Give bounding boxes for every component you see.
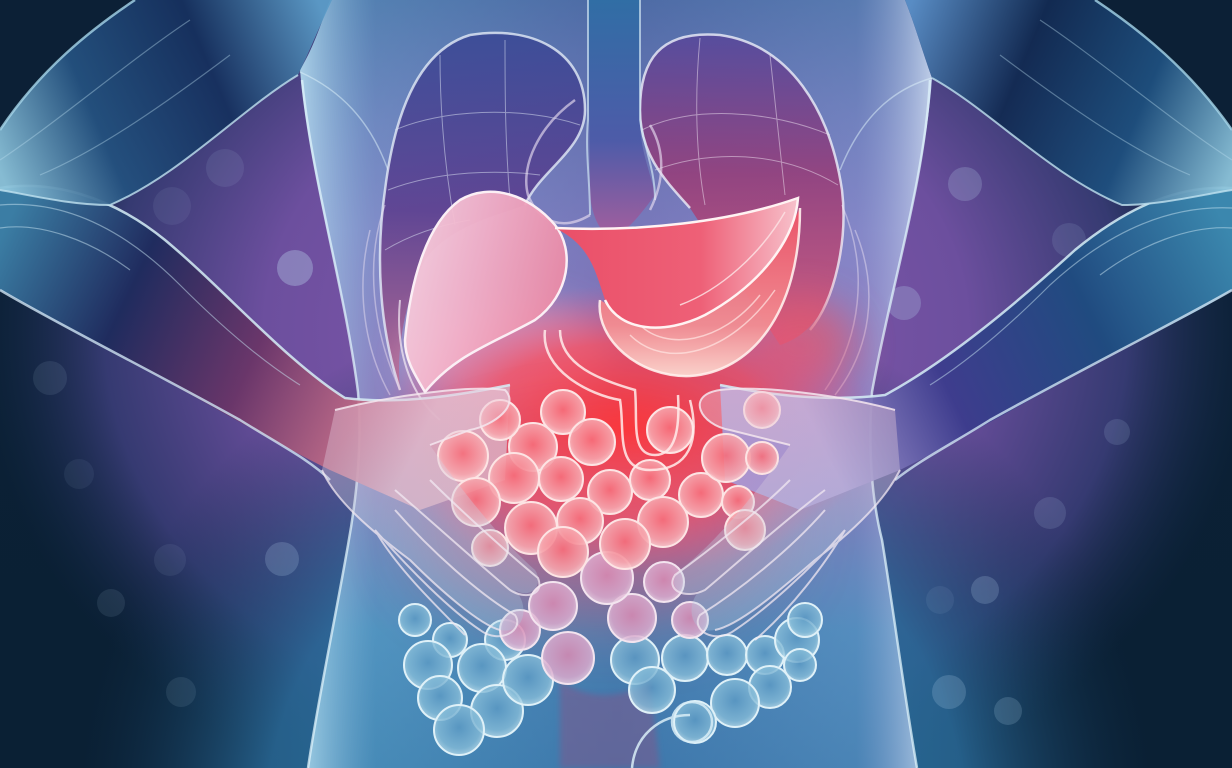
right hand xyxy=(672,389,900,640)
torso xyxy=(300,0,932,768)
left forearm xyxy=(0,186,510,510)
liver xyxy=(405,192,567,392)
red inflammation glow xyxy=(375,285,875,615)
left lung xyxy=(380,33,585,390)
esophagus xyxy=(526,0,661,235)
upper small intestine loops xyxy=(438,390,780,577)
ribcage side contours xyxy=(363,205,869,395)
liver right lobe (pale) xyxy=(405,192,567,392)
pale pink haze beneath the liver xyxy=(410,300,855,415)
right upper arm xyxy=(905,0,1232,205)
bokeh light dots xyxy=(33,149,1130,725)
liver left lobe (red) xyxy=(555,198,798,328)
lower intestine loops xyxy=(399,603,822,755)
mid intestine loops xyxy=(500,552,708,684)
left upper arm xyxy=(0,0,332,205)
left hand xyxy=(322,389,539,636)
pale abdominal membrane xyxy=(399,300,440,420)
lower abdomen shading xyxy=(560,680,660,768)
descending colon xyxy=(632,702,712,768)
right lung xyxy=(640,34,844,345)
right forearm xyxy=(720,188,1232,510)
duodenum tube xyxy=(545,330,694,470)
stomach xyxy=(600,208,800,376)
